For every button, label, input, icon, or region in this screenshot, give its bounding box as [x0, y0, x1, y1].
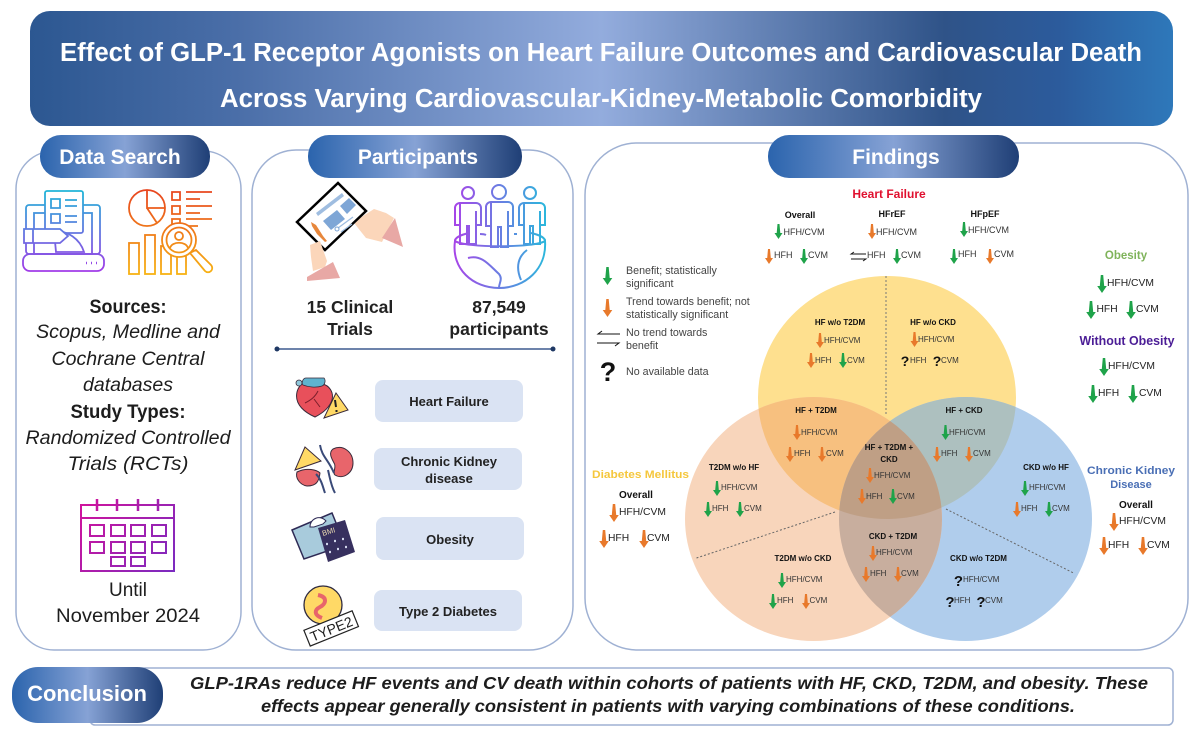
cohort: HF without CKD [901, 318, 959, 369]
cohort: CKD + T2DM [862, 532, 919, 582]
cohort: CKD without T2DM: ? [976, 594, 986, 611]
cohort: HF + T2DM + CKD: CVM [897, 492, 915, 501]
cohort: T2DM without HF: HFH/CVM [721, 483, 758, 492]
icon: scale and BMI calculator [292, 513, 355, 562]
without obesity results: HFH [1098, 388, 1119, 399]
row: heart failure: Heart Failure [409, 394, 489, 409]
cohort: CKD without T2DM: HFH/CVM [963, 575, 1000, 584]
icon: kidneys with warning [295, 445, 353, 493]
legend [597, 265, 750, 387]
text: trials count [307, 297, 393, 339]
cohort: T2DM without HF: HFH [712, 504, 729, 513]
cohort: CKD without T2DM: CVM [985, 596, 1003, 605]
heading: data search: Data Search [59, 146, 181, 169]
cohort: HF without CKD: HFH [910, 356, 927, 365]
icon: heart with warning [296, 378, 348, 418]
cohort: T2DM without CKD [769, 554, 832, 609]
row: heart failure [296, 378, 523, 422]
cohort: HF without T2DM: HFH [815, 356, 832, 365]
diabetes mellitus results: Diabetes Mellitus [592, 469, 689, 481]
HFpEF [950, 209, 1014, 264]
HFpEF: HFH [958, 249, 976, 259]
cohort: HF + T2DM: HF + T2DM [795, 406, 837, 415]
row: type 2 diabetes: Type 2 Diabetes [399, 604, 497, 619]
chronic kidney disease results: Overall [1119, 500, 1153, 511]
HFpEF: HFH/CVM [968, 225, 1009, 235]
without obesity results: CVM [1139, 388, 1162, 399]
chronic kidney disease results: HFH [1108, 540, 1129, 551]
obesity results: HFH/CVM [1107, 278, 1154, 289]
legend: statistically significant [626, 309, 728, 321]
cohort: T2DM without HF: T2DM w/o HF [709, 463, 759, 472]
legend: benefit [626, 340, 658, 352]
cohort: CKD without HF: HFH/CVM [1029, 483, 1066, 492]
cohort: HF without CKD: ? [933, 353, 941, 369]
text: sources: databases [83, 375, 174, 396]
HF overall: Overall [785, 210, 815, 220]
venn diagram [685, 276, 1092, 641]
cohort: HF + T2DM + CKD: HFH [866, 492, 883, 501]
chronic kidney disease results: CVM [1147, 540, 1170, 551]
title banner: Across Varying Cardiovascular-Kidney-Metabolic Comorbidity [220, 85, 983, 113]
text: participant count: participants [449, 319, 549, 339]
HFrEF [851, 209, 921, 264]
diabetes mellitus results: HFH/CVM [619, 507, 666, 518]
chronic kidney disease results: Chronic Kidney [1087, 465, 1176, 477]
panel: participants [252, 135, 573, 650]
conclusion label [12, 667, 163, 723]
cohort: HF + T2DM + CKD: HF + T2DM + [865, 443, 914, 452]
cohort: CKD without HF [1013, 463, 1070, 517]
title banner: Effect of GLP-1 Receptor Agonists on Heart Failure Outcomes and Cardiovascular Death [60, 39, 1142, 67]
obesity results: HFH [1096, 304, 1118, 315]
cohort: HF without CKD: HFH/CVM [918, 335, 955, 344]
cohort: HF + CKD: CVM [973, 449, 991, 458]
text: study types: Randomized Controlled [26, 428, 232, 449]
cohort: T2DM without CKD: CVM [810, 596, 828, 605]
without obesity results [1080, 334, 1175, 403]
icon: type 2 label [304, 586, 358, 646]
cohort: HF without CKD: HF w/o CKD [910, 318, 956, 327]
title banner [30, 11, 1173, 126]
cohort: T2DM without CKD: HFH/CVM [786, 575, 823, 584]
cohort: HF + CKD: HFH/CVM [949, 428, 986, 437]
legend: Trend towards benefit; not [626, 296, 750, 308]
cohort: CKD + T2DM: CKD + T2DM [869, 532, 917, 541]
icon: scale and BMI calculator: BMI [321, 525, 336, 538]
cohort: CKD without T2DM: ? [945, 594, 955, 611]
diabetes mellitus results: CVM [647, 533, 670, 544]
HF overall [765, 210, 828, 264]
HF overall: HFH [774, 250, 792, 260]
heading: findings: Findings [852, 146, 940, 169]
heading: participants [308, 135, 522, 178]
row: chronic kidney disease: disease [425, 471, 473, 486]
icon: people on globe [455, 185, 545, 288]
text: search date: Until [109, 580, 147, 601]
without obesity results: HFH/CVM [1108, 361, 1155, 372]
cohort: CKD + T2DM: HFH/CVM [876, 548, 913, 557]
cohort: CKD without T2DM: ? [954, 573, 963, 590]
text: study types [26, 402, 232, 475]
row: type 2 diabetes [304, 586, 522, 646]
cohort: CKD + T2DM: HFH [870, 569, 887, 578]
icon: calendar [81, 499, 174, 571]
heading: data search [40, 135, 210, 178]
row: obesity: Obesity [426, 532, 475, 547]
chronic kidney disease results [1087, 465, 1176, 555]
chronic kidney disease results: HFH/CVM [1119, 516, 1166, 527]
cohort: CKD without T2DM: HFH [954, 596, 971, 605]
HFpEF: CVM [994, 249, 1014, 259]
HFrEF: HFrEF [878, 209, 906, 219]
cohort: T2DM without HF [704, 463, 762, 517]
obesity results: Obesity [1105, 250, 1148, 262]
icon: type 2 label: TYPE2 [308, 613, 355, 645]
text: sources: Scopus, Medline and [36, 322, 221, 343]
cohort: T2DM without CKD: HFH [777, 596, 794, 605]
conclusion text: effects appear generally consistent in patients with varying combinations of these conditions. [261, 696, 1075, 716]
cohort: CKD + T2DM: CVM [901, 569, 919, 578]
obesity results: CVM [1136, 304, 1159, 315]
cohort: HF + CKD: HFH [941, 449, 958, 458]
text: participant count [449, 297, 549, 339]
cohort: HF + T2DM: CVM [826, 449, 844, 458]
legend: No available data [626, 366, 709, 378]
cohort: CKD without T2DM [945, 554, 1007, 611]
heading: participants: Participants [358, 146, 478, 169]
text: search date [56, 580, 200, 627]
row: chronic kidney disease [295, 445, 522, 493]
diabetes mellitus results [592, 469, 689, 548]
cohort: HF without T2DM: HF w/o T2DM [815, 318, 865, 327]
heading: findings [768, 135, 1019, 178]
conclusion [12, 667, 1173, 725]
heart failure heading: Heart Failure [852, 187, 926, 201]
HFrEF: HFH/CVM [876, 227, 917, 237]
conclusion label: Conclusion [27, 681, 147, 706]
icon: laptop checklist [23, 191, 104, 271]
diabetes mellitus results: Overall [619, 490, 653, 501]
row: chronic kidney disease: Chronic Kidney [401, 454, 498, 469]
cohort: HF + CKD [933, 406, 991, 462]
panel: findings [585, 135, 1188, 650]
text: study types: Study Types: [70, 402, 186, 423]
HFpEF: HFpEF [970, 209, 1000, 219]
cohort: T2DM without HF: CVM [744, 504, 762, 513]
obesity results [1086, 250, 1159, 319]
without obesity results: Without Obesity [1080, 334, 1175, 348]
cohort: CKD without HF: CKD w/o HF [1023, 463, 1069, 472]
cohort: T2DM without CKD: T2DM w/o CKD [775, 554, 832, 563]
HFrEF: HFH [867, 250, 886, 260]
icon: tablet and hands [297, 183, 403, 281]
HFrEF: CVM [901, 250, 921, 260]
divider with end dots [274, 346, 556, 352]
icon: chart and magnifier [129, 190, 212, 274]
row: obesity [292, 513, 524, 562]
HF overall: HFH/CVM [784, 227, 824, 237]
text: trials count: 15 Clinical [307, 297, 393, 317]
chronic kidney disease results: Disease [1110, 479, 1152, 491]
cohort: HF without T2DM: CVM [847, 356, 865, 365]
text: trials count: Trials [327, 319, 373, 339]
legend: No trend towards [626, 327, 707, 339]
cohort: HF + T2DM [786, 406, 844, 462]
text: study types: Trials (RCTs) [68, 454, 188, 475]
legend: ? [600, 357, 616, 387]
cohort: HF without T2DM [807, 318, 865, 368]
conclusion text: GLP-1RAs reduce HF events and CV death within cohorts of patients with HF, CKD, T2DM, and obesity. These [190, 673, 1148, 693]
cohort: CKD without HF: CVM [1052, 504, 1070, 513]
text: participant count: 87,549 [472, 297, 526, 317]
cohort: HF + T2DM + CKD [858, 443, 915, 504]
legend: Benefit; statistically [626, 265, 718, 277]
text: sources: Sources: [90, 297, 166, 318]
cohort: HF without CKD: CVM [941, 356, 959, 365]
panel: data search [16, 135, 241, 650]
legend: significant [626, 278, 674, 290]
cohort: HF + CKD: HF + CKD [945, 406, 983, 415]
text: sources [36, 297, 221, 396]
text: search date: November 2024 [56, 606, 200, 627]
cohort: HF + T2DM: HFH/CVM [801, 428, 838, 437]
cohort: HF + T2DM + CKD: CKD [880, 455, 898, 464]
cohort: CKD without HF: HFH [1021, 504, 1038, 513]
conclusion text [190, 673, 1148, 716]
text: sources: Cochrane Central [52, 349, 205, 370]
cohort: HF without T2DM: HFH/CVM [824, 336, 861, 345]
cohort: CKD without T2DM: CKD w/o T2DM [950, 554, 1007, 563]
cohort: HF + T2DM + CKD: HFH/CVM [874, 471, 911, 480]
HF overall: CVM [808, 250, 828, 260]
cohort: HF + T2DM: HFH [794, 449, 811, 458]
cohort: HF without CKD: ? [901, 353, 909, 369]
diabetes mellitus results: HFH [608, 533, 629, 544]
